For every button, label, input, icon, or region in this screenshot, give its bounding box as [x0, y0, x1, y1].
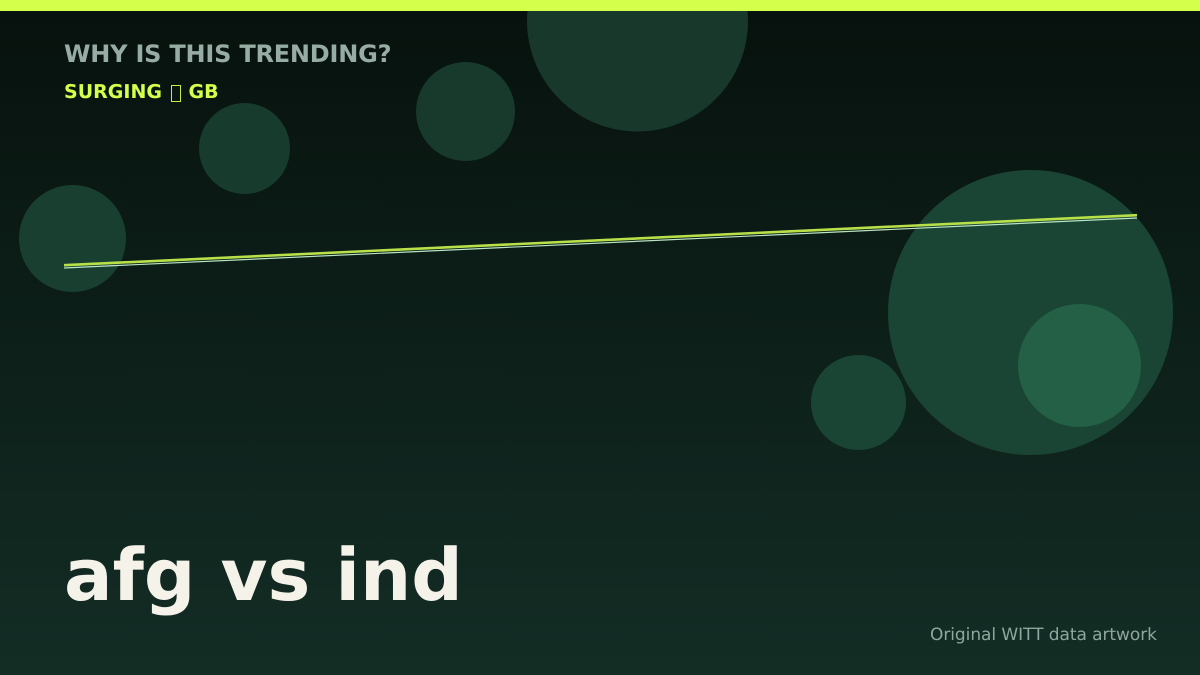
- status label: GB: [188, 81, 219, 103]
- trend line: [64, 215, 1137, 268]
- top accent bar: [0, 0, 1200, 11]
- status label: [64, 81, 219, 103]
- status label: SURGING: [64, 81, 162, 103]
- main title: afg vs ind: [64, 533, 463, 617]
- credit: Original WITT data artwork: [930, 625, 1157, 645]
- eyebrow heading: WHY IS THIS TRENDING?: [64, 40, 392, 68]
- bubble cluster: [19, 0, 1173, 455]
